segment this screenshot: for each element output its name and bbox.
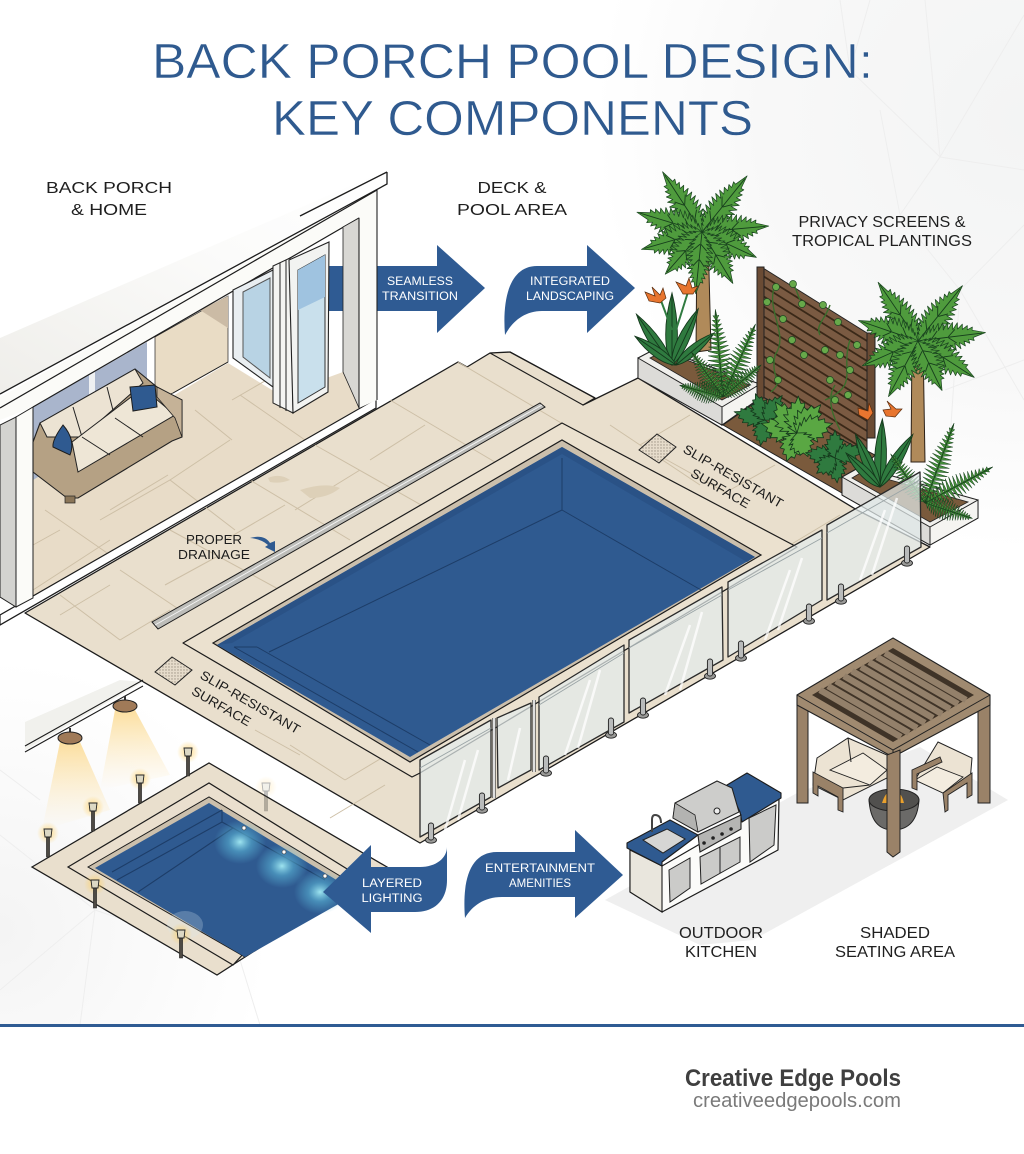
- small pool deck: [32, 763, 387, 975]
- drain channel: [152, 403, 545, 629]
- cabinet side: [630, 850, 662, 912]
- label: deck and pool area: DECK &: [478, 180, 547, 197]
- pendant lamp: [58, 728, 82, 744]
- fern: lower right: [882, 419, 999, 529]
- label: shaded seating area: SHADED: [860, 925, 930, 942]
- dark ground plant: [731, 389, 791, 447]
- label: shaded seating area: SEATING AREA: [835, 944, 955, 961]
- proper drainage label: PROPER: [186, 532, 242, 547]
- window glass: [33, 342, 147, 500]
- label: back porch and home: & HOME: [71, 202, 147, 219]
- label: shaded seating area: [835, 925, 955, 961]
- slip-resistant swatch, left: [155, 657, 192, 685]
- back porch and home: [0, 170, 387, 625]
- threshold: [0, 399, 376, 625]
- outdoor kitchen: [627, 773, 781, 912]
- slip-resistant label, left: SURFACE: [189, 683, 254, 729]
- planting bed soil: [723, 397, 875, 493]
- interior wall: [155, 296, 228, 400]
- slip-resistant label, left: SLIP-RESISTANT: [198, 667, 303, 737]
- folding door, centre stiles: [273, 258, 293, 413]
- cabinet door: [669, 858, 690, 902]
- label: privacy screens and tropical plantings: [792, 214, 972, 250]
- drainage arrow: [250, 537, 275, 552]
- arrow: integrated landscaping: INTEGRATED: [530, 276, 610, 288]
- palm tree: left: [633, 164, 770, 352]
- arrow: integrated landscaping: [504, 245, 635, 335]
- bright ground plant: [758, 394, 836, 466]
- label: deck and pool area: POOL AREA: [457, 202, 567, 219]
- sofa: [813, 738, 887, 812]
- pergola roof: [797, 638, 990, 757]
- roof: [0, 170, 387, 394]
- lighting vignette: [25, 680, 387, 975]
- ground plants: planting bed: [731, 389, 867, 484]
- fire pit: [869, 789, 919, 830]
- sofa pillow, square: [130, 385, 157, 411]
- arrow: seamless transition: TRANSITION: [382, 291, 458, 303]
- proper drainage label: [178, 532, 250, 562]
- beam: [0, 190, 377, 420]
- arrow: layered lighting: LAYERED: [362, 878, 422, 890]
- dark ground plant: [804, 430, 867, 484]
- pergola front post: [887, 750, 900, 857]
- footer website: creativeedgepools.com: [693, 1090, 901, 1112]
- pool light glow: [167, 911, 203, 939]
- slip-resistant label, right: SURFACE: [688, 465, 753, 511]
- label: privacy screens and tropical plantings: TROPICAL PLANTINGS: [792, 233, 972, 250]
- arrow: layered lighting: [323, 845, 447, 933]
- planter: upper left: [638, 348, 757, 425]
- arrow tail behind door: [329, 266, 344, 311]
- right post: [343, 190, 377, 408]
- label: back porch and home: BACK PORCH: [46, 180, 172, 197]
- arrow: seamless transition: [376, 245, 485, 333]
- folding glass door, left panel: [233, 270, 273, 387]
- light cone: [100, 710, 170, 790]
- grill: [673, 781, 741, 852]
- sink: [643, 829, 685, 853]
- pool steps: [112, 810, 325, 892]
- folding door, right panel: [289, 242, 329, 413]
- fern: planter left: [677, 308, 768, 407]
- title: KEY COMPONENTS: [272, 92, 753, 146]
- label: outdoor kitchen: KITCHEN: [685, 944, 757, 961]
- label: deck and pool area: [457, 180, 567, 219]
- arrow: entertainment amenities: [464, 830, 623, 918]
- pergola with seating: [797, 638, 990, 857]
- privacy screen: [757, 267, 875, 453]
- climbing vines: [764, 280, 860, 430]
- left post: [0, 407, 33, 607]
- countertop, sink side: [627, 820, 698, 866]
- light cone: [42, 742, 110, 830]
- faucet: [652, 815, 661, 832]
- title: BACK PORCH POOL DESIGN:: [152, 35, 873, 89]
- slip-resistant swatch, right: [639, 434, 676, 463]
- proper drainage label: DRAINAGE: [178, 547, 250, 562]
- title: [152, 35, 873, 146]
- pendant lamp: [113, 696, 137, 712]
- fridge: [749, 805, 776, 862]
- label: privacy screens and tropical plantings: PRIVACY SCREENS &: [798, 214, 966, 231]
- porch floor: [33, 363, 359, 597]
- label: back porch and home: [46, 180, 172, 219]
- footer brand name: Creative Edge Pools: [685, 1065, 901, 1092]
- sofa pillow, leaning: [53, 425, 72, 455]
- slip-resistant label, right: SLIP-RESISTANT: [681, 441, 786, 511]
- overhead fascia: [25, 680, 143, 752]
- bollard lights: [37, 741, 277, 958]
- pool light glow: [294, 870, 346, 914]
- slip-resistant label, right: [672, 441, 786, 526]
- label: outdoor kitchen: [679, 925, 763, 961]
- countertop, right side: [727, 773, 781, 822]
- pool light glow: [214, 820, 266, 864]
- pergola rear post: [797, 700, 808, 803]
- footer: [0, 1024, 1024, 1154]
- pool light glow: [256, 844, 308, 888]
- arrow: seamless transition: SEAMLESS: [387, 276, 453, 288]
- cabinet body: [630, 798, 779, 912]
- planter: lower right: [842, 467, 978, 545]
- pool deck: [25, 352, 930, 843]
- sofa: [33, 369, 182, 503]
- floor shadow under kitchen and pergola: [605, 747, 1008, 945]
- armchair: [912, 742, 972, 812]
- arrow: entertainment amenities: ENTERTAINMENT: [485, 863, 595, 875]
- pool with coping and water: [183, 423, 797, 777]
- pergola rear post: [978, 700, 990, 803]
- palm tree: right: [854, 274, 988, 462]
- arrow: layered lighting: LIGHTING: [362, 893, 423, 905]
- arrow: entertainment amenities: AMENITIES: [509, 878, 571, 890]
- bird of paradise: right: [842, 401, 917, 491]
- small pool water: [95, 803, 358, 957]
- cabinet doors, double: [700, 837, 740, 884]
- bird of paradise: left: [632, 278, 717, 369]
- slip-resistant label, left: [189, 667, 303, 752]
- arrow: integrated landscaping: LANDSCAPING: [526, 291, 614, 303]
- interior opening: [33, 218, 359, 600]
- glass fence: [420, 472, 921, 843]
- label: outdoor kitchen: OUTDOOR: [679, 925, 763, 942]
- landscaping: [632, 164, 999, 545]
